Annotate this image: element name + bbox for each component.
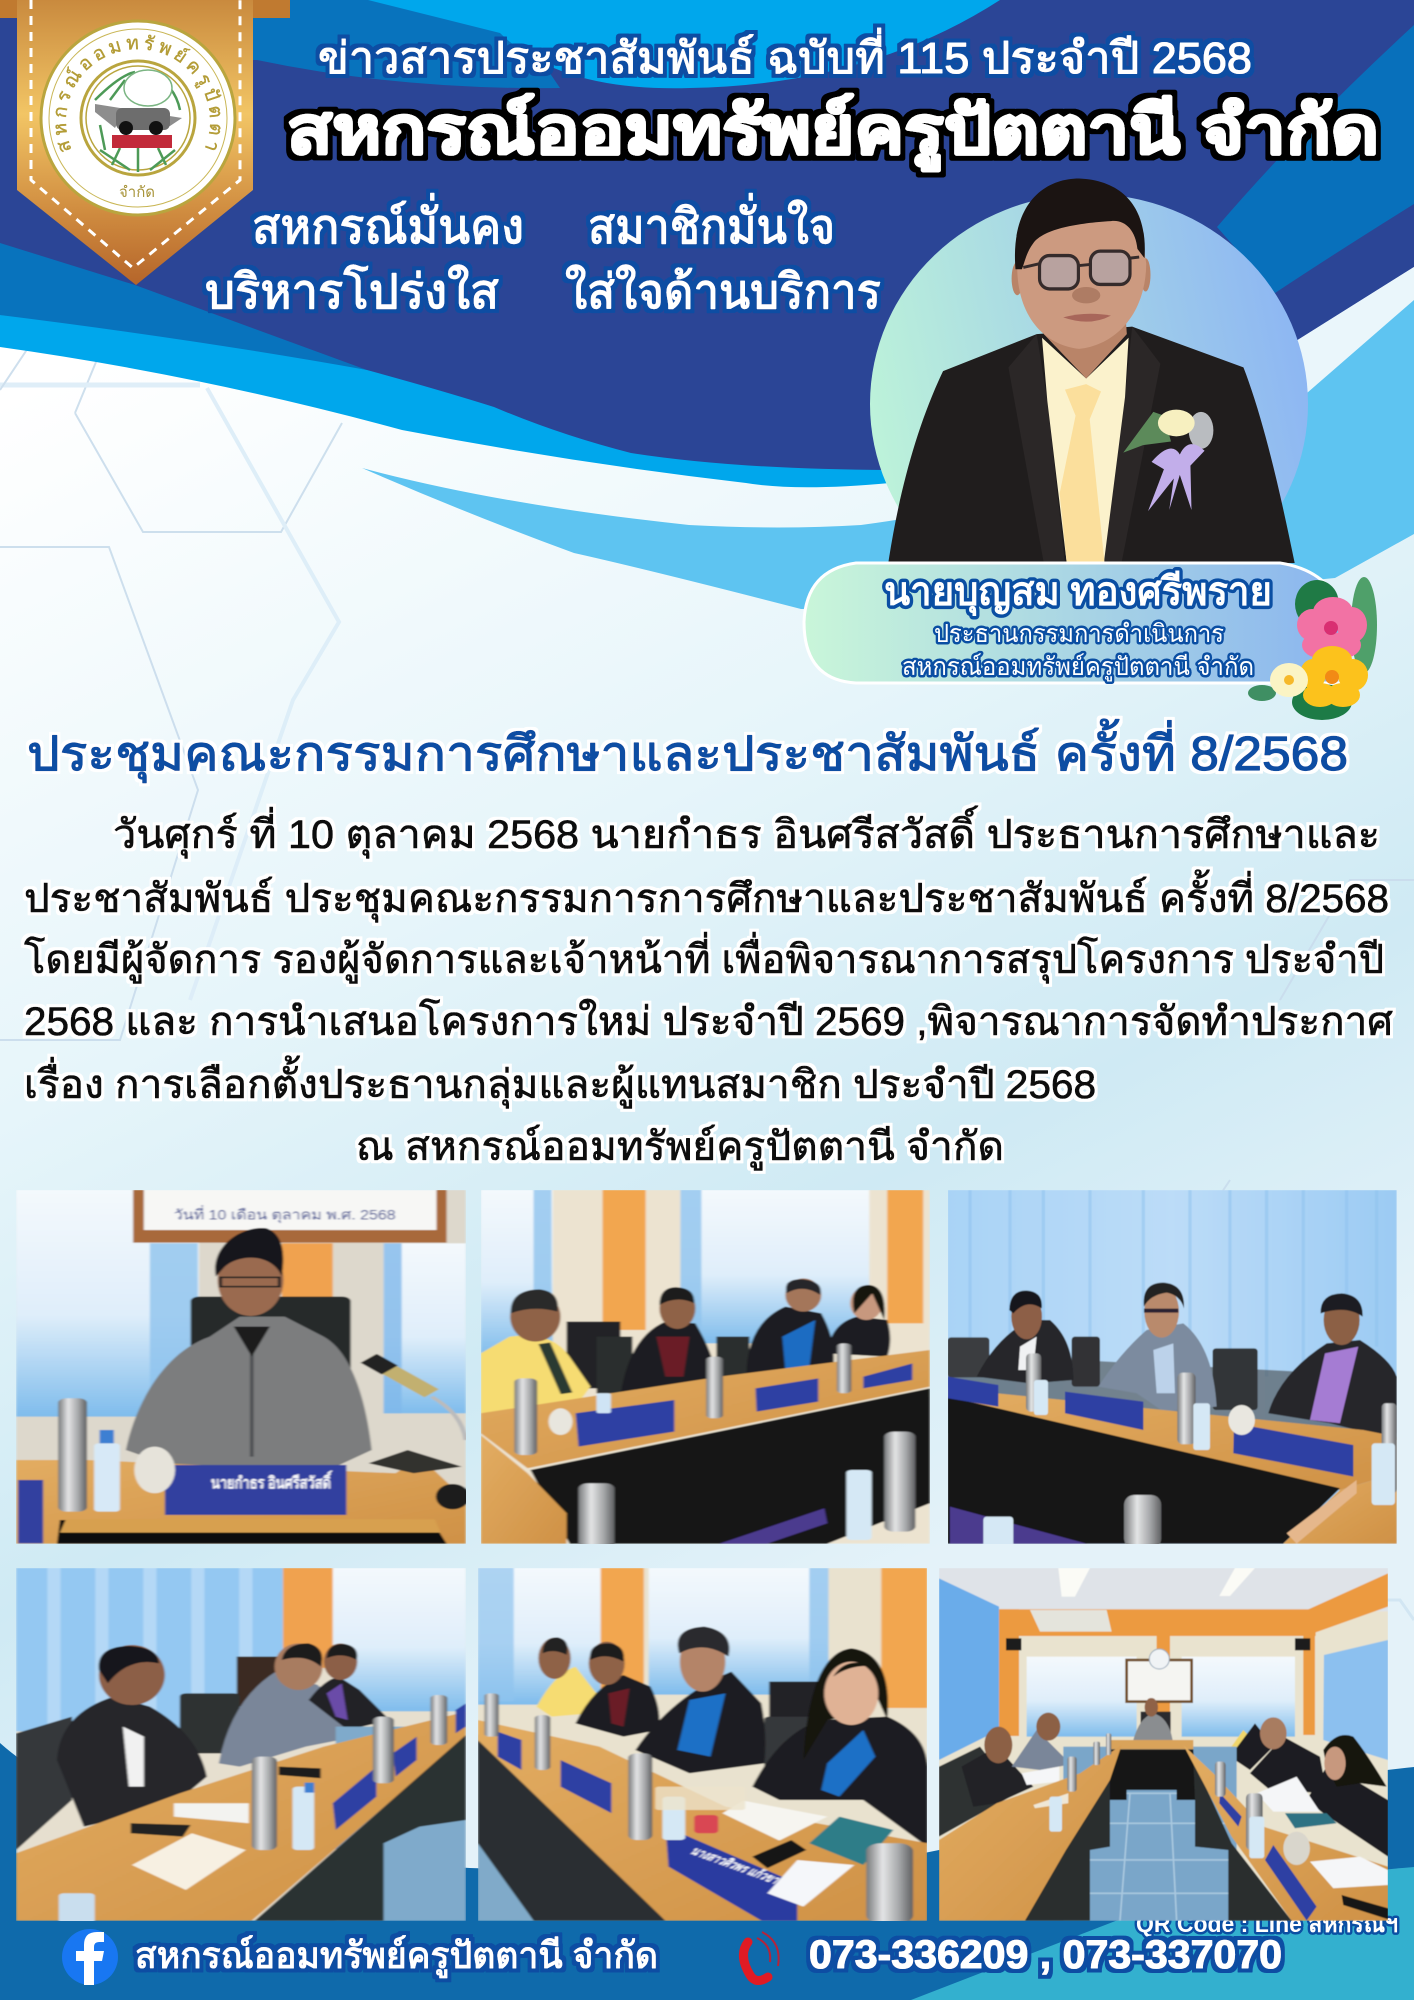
QR code caption: QR Code : Line สหกรณ์ฯ <box>1136 1910 1398 1938</box>
left medium blue band <box>0 243 367 370</box>
icon: facebook <box>62 1929 118 1985</box>
footer phone numbers: 073-336209 , 073-337070 <box>809 1933 1282 1977</box>
header navy wave <box>0 0 1414 474</box>
body paragraph: เรื่อง การเลือกตั้งประธานกลุ่มและผู้แทนสมาชิก ประจำปี 2568 <box>24 1055 1096 1109</box>
portrait circle <box>870 194 1308 614</box>
photo 4: members along the table <box>16 1568 466 1923</box>
board date text: วันที่ 10 เดือน ตุลาคม พ.ศ. 2568 <box>174 1205 396 1223</box>
top cyan swoosh <box>368 0 1000 88</box>
photo 1: chairman at the table: นายกำธร อินศรีสวัสดิ์ <box>211 1470 332 1492</box>
slogans: สหกรณ์มั่นคง <box>252 193 524 254</box>
footer cooperative name: สหกรณ์ออมทรัพย์ครูปัตตานี จำกัด <box>135 1935 658 1978</box>
body paragraph: วันศุกร์ ที่ 10 ตุลาคม 2568 นายกำธร อินศรีสวัสดิ์ ประธานการศึกษาและ <box>113 805 1380 859</box>
desk nameplate: นางสาวศิวพร แก้วขาว <box>687 1845 790 1888</box>
body paragraph: โดยมีผู้จัดการ รองผู้จัดการและเจ้าหน้าที่ เพื่อพิจารณาการสรุปโครงการ ประจำปี <box>24 932 1384 984</box>
bottom blue band <box>0 1743 1414 2000</box>
chairman position: ประธานกรรมการดำเนินการ <box>934 620 1224 648</box>
top ribbon strip <box>0 0 290 18</box>
body paragraph: ณ สหกรณ์ออมทรัพย์ครูปัตตานี จำกัด <box>356 1124 1004 1170</box>
body paragraph: ประชาสัมพันธ์ ประชุมคณะกรรมการการศึกษาและประชาสัมพันธ์ ครั้งที่ 8/2568 <box>24 869 1389 923</box>
badge ribbon with logo <box>17 0 253 285</box>
chairman name plate <box>804 563 1340 683</box>
left cyan band <box>0 315 900 487</box>
body paragraph: 2568 และ การนำเสนอโครงการใหม่ ประจำปี 2569 ,พิจารณาการจัดทำประกาศ <box>24 998 1393 1044</box>
cooperative name under chairman: สหกรณ์ออมทรัพย์ครูปัตตานี จำกัด <box>902 653 1254 682</box>
icon: tropical flowers <box>1248 577 1377 720</box>
slogans <box>205 193 881 319</box>
chairman name: นายบุญสม ทองศรีพราย <box>884 570 1272 617</box>
slogans: บริหารโปร่งใส <box>205 264 499 319</box>
newsletter issue line: ข่าวสารประชาสัมพันธ์ ฉบับที่ 115 ประจำปี 2568 <box>318 27 1252 83</box>
white wave on right <box>1296 267 1414 393</box>
icon: phone <box>743 1932 779 1981</box>
logo seal <box>40 20 236 216</box>
slogans: ใส่ใจด้านบริการ <box>565 264 881 319</box>
slogans: สมาชิกมั่นใจ <box>588 193 835 254</box>
body paragraph <box>24 805 1393 1170</box>
meeting heading: ประชุมคณะกรรมการศึกษาและประชาสัมพันธ์ ครั้งที่ 8/2568 <box>27 719 1348 783</box>
bottom cyan corner <box>911 1867 1414 2000</box>
cooperative title: สหกรณ์ออมทรัพย์ครูปัตตานี จำกัด <box>287 93 1379 172</box>
top medium blue swoosh <box>230 0 560 88</box>
background hexagon pattern <box>0 330 1414 1620</box>
light blue swoosh <box>362 300 1414 610</box>
photo 6: full meeting room view <box>939 1568 1388 1921</box>
chairman portrait <box>888 179 1295 563</box>
photo 5: members and smiling woman <box>478 1568 927 1923</box>
right medium blue swoosh <box>1217 25 1414 293</box>
photo 2: committee members with microphone <box>481 1190 930 1550</box>
photo 3: three committee members <box>948 1190 1397 1548</box>
logo limited text: จำกัด <box>119 184 155 201</box>
photo 1: chairman at the table <box>16 1190 469 1544</box>
